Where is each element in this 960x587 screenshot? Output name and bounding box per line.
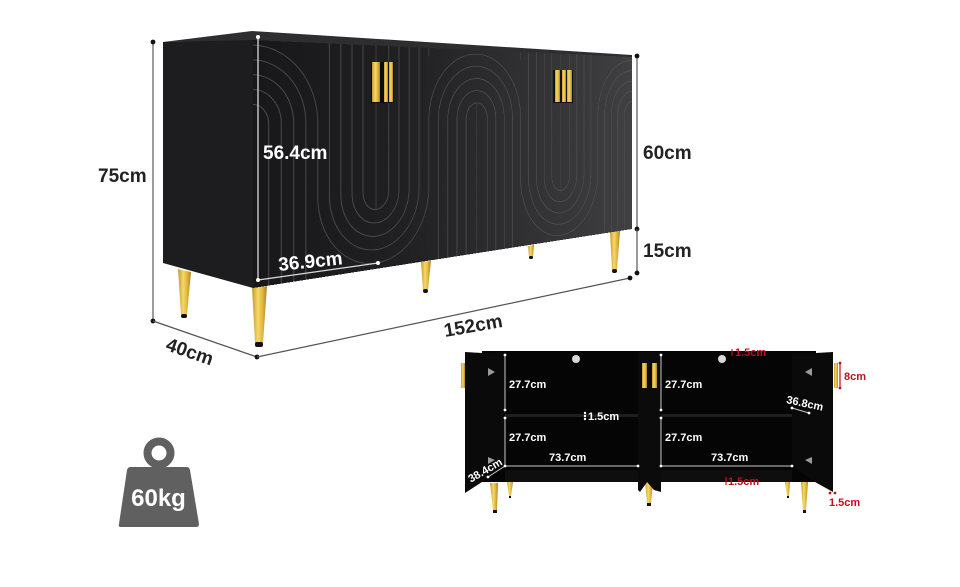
width dimension: 152cm: 152cm — [442, 311, 504, 342]
right open door — [792, 352, 833, 492]
depth dimension: 40cm: 40cm — [163, 335, 216, 370]
body height dimension: 60cm — [635, 54, 692, 231]
shelves — [505, 414, 638, 417]
left bay measurements: 38.4cm — [466, 456, 505, 485]
icon: right door handle — [553, 70, 573, 103]
sideboard front panel with arch pattern — [253, 40, 632, 288]
icon: left door handle — [371, 62, 394, 103]
open cabinet interior view — [461, 351, 838, 513]
red thickness and handle measurements: 1.5cm — [735, 347, 766, 359]
depth dimension: 40cm — [153, 321, 259, 370]
handles — [461, 363, 465, 388]
width dimension: 152cm — [257, 276, 632, 357]
legs — [490, 482, 808, 513]
right bay measurements: 27.7cm — [665, 432, 703, 444]
left bay measurements — [466, 354, 639, 485]
door width label: 36.9cm: 36.9cm — [277, 248, 344, 276]
icon: weight 60kg — [119, 442, 199, 527]
cabinet body — [482, 351, 816, 482]
left open door — [465, 352, 505, 493]
total height dimension: 75cm: 75cm — [98, 166, 147, 187]
red thickness and handle measurements — [726, 347, 866, 509]
hinges and clips — [488, 355, 812, 464]
red thickness and handle measurements: 1.5cm — [829, 497, 860, 509]
left bay measurements: 73.7cm — [549, 452, 587, 464]
right bay measurements: 27.7cm — [665, 379, 703, 391]
left bay measurements: 27.7cm — [509, 379, 547, 391]
door height dimension: 56.4cm — [256, 35, 380, 282]
door height dimension: 56.4cm: 56.4cm — [263, 143, 327, 164]
body height dimension: 60cm: 60cm — [643, 143, 692, 164]
right bay measurements: 36.8cm — [785, 394, 824, 414]
right bay measurements: 73.7cm — [711, 452, 749, 464]
leg height dimension: 15cm — [635, 229, 692, 275]
red thickness and handle measurements: 1.5cm — [728, 476, 759, 488]
red thickness and handle measurements: 8cm — [844, 371, 866, 383]
left bay measurements: 1.5cm — [588, 411, 619, 423]
left bay measurements: 27.7cm — [509, 432, 547, 444]
icon: weight 60kg: 60kg — [131, 485, 186, 512]
leg height dimension: 15cm: 15cm — [643, 241, 692, 262]
total height dimension: 75cm — [98, 40, 155, 323]
right bay measurements — [660, 354, 824, 467]
centre folded doors — [638, 352, 661, 492]
